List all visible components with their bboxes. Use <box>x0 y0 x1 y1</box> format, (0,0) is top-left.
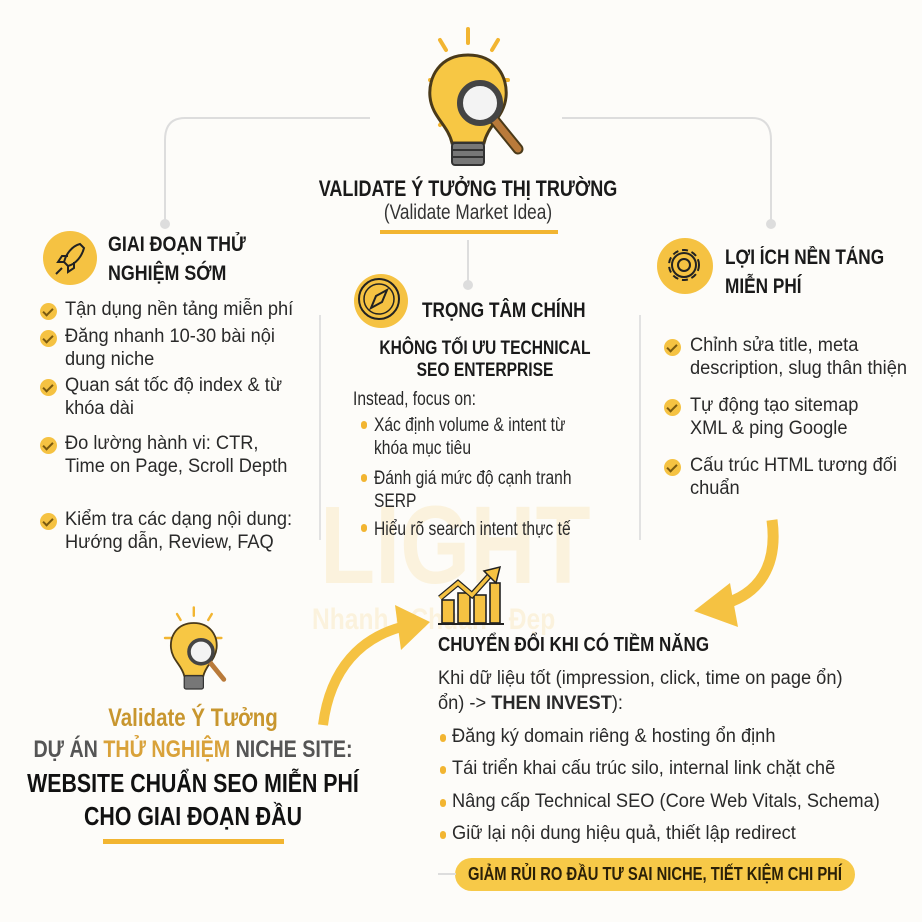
icon: compass <box>354 274 408 328</box>
heading: NGHIỆM SỚM <box>108 262 226 285</box>
checklist: chuẩn <box>690 478 740 499</box>
panel: main focus <box>353 274 591 540</box>
checklist: khóa dài <box>65 398 134 419</box>
panel: conversion <box>438 632 880 844</box>
title <box>318 176 617 234</box>
heading <box>108 232 246 285</box>
icon: small bulb <box>164 606 226 690</box>
checklist: Đo lường hành vi: CTR, <box>65 433 258 454</box>
subheading <box>379 336 591 381</box>
checklist <box>40 298 294 553</box>
checklist: description, slug thân thiện <box>690 358 907 379</box>
bullets <box>440 726 880 844</box>
checklist: Time on Page, Scroll Depth <box>65 456 287 477</box>
heading: TRỌNG TÂM CHÍNH <box>422 299 586 322</box>
checklist: dung niche <box>65 349 154 370</box>
project title block: DỰ ÁN THỬ NGHIỆM NICHE SITE: <box>33 736 353 763</box>
checklist: Hướng dẫn, Review, FAQ <box>65 532 274 553</box>
panel: platform benefits <box>657 238 907 499</box>
title: (Validate Market Idea) <box>384 201 552 224</box>
bullets: Giữ lại nội dung hiệu quả, thiết lập redirect <box>452 823 796 844</box>
checklist: Kiểm tra các dạng nội dung: <box>65 509 292 530</box>
panel: early testing <box>40 231 294 553</box>
intro: ổn) -> THEN INVEST): <box>438 693 623 714</box>
icon: rocket <box>43 231 97 285</box>
heading <box>725 246 884 298</box>
heading: MIỄN PHÍ <box>725 275 802 298</box>
title: VALIDATE Ý TƯỞNG THỊ TRƯỜNG <box>319 176 617 201</box>
checklist: Cấu trúc HTML tương đối <box>690 455 897 476</box>
callout pill <box>455 858 855 891</box>
callout pill: GIẢM RỦI RO ĐẦU TƯ SAI NICHE, TIẾT KIỆM CHI PHÍ <box>468 864 842 884</box>
icon: bulb with magnifier <box>428 27 524 166</box>
checklist: Tự động tạo sitemap <box>690 395 858 416</box>
checklist: Đăng nhanh 10-30 bài nội <box>65 326 275 347</box>
subheading: KHÔNG TỐI ƯU TECHNICAL <box>379 338 591 359</box>
arrow: left curved <box>318 605 430 726</box>
icon: gear <box>657 238 713 294</box>
focus list: Xác định volume & intent từ <box>374 415 565 436</box>
checklist: Chỉnh sửa title, meta <box>690 335 858 356</box>
focus list <box>353 389 572 540</box>
checklist <box>664 335 907 499</box>
project title block: Validate Ý Tưởng <box>108 704 278 732</box>
checklist: XML & ping Google <box>690 418 848 439</box>
focus list: SERP <box>374 491 416 512</box>
focus list: Đánh giá mức độ cạnh tranh <box>374 468 572 489</box>
checklist: Tận dụng nền tảng miễn phí <box>65 299 293 320</box>
watermark: Nhanh - Chuẩn - Đẹp <box>312 603 555 636</box>
icon: growth chart <box>438 566 504 625</box>
bullets: Đăng ký domain riêng & hosting ổn định <box>452 726 775 747</box>
project title block: CHO GIAI ĐOẠN ĐẦU <box>84 801 302 831</box>
project title block: WEBSITE CHUẨN SEO MIỄN PHÍ <box>27 768 359 798</box>
heading: LỢI ÍCH NỀN TẢNG <box>725 246 884 269</box>
intro <box>438 668 843 714</box>
heading: GIAI ĐOẠN THỬ <box>108 233 246 256</box>
focus list: khóa mục tiêu <box>374 438 471 459</box>
intro: Khi dữ liệu tốt (impression, click, time on page ổn) <box>438 668 843 689</box>
focus list: Hiểu rõ search intent thực tế <box>374 519 571 540</box>
bullets: Tái triển khai cấu trúc silo, internal link chặt chẽ <box>452 758 835 779</box>
checklist: Quan sát tốc độ index & từ <box>65 375 282 396</box>
watermark: LIGHT <box>320 484 591 607</box>
focus list: Instead, focus on: <box>353 389 476 410</box>
subheading: SEO ENTERPRISE <box>417 360 553 381</box>
heading: CHUYỂN ĐỔI KHI CÓ TIỀM NĂNG <box>438 634 709 656</box>
bullets: Nâng cấp Technical SEO (Core Web Vitals, Schema) <box>452 791 880 812</box>
arrow: right curved <box>694 519 779 627</box>
project title block <box>27 704 360 844</box>
